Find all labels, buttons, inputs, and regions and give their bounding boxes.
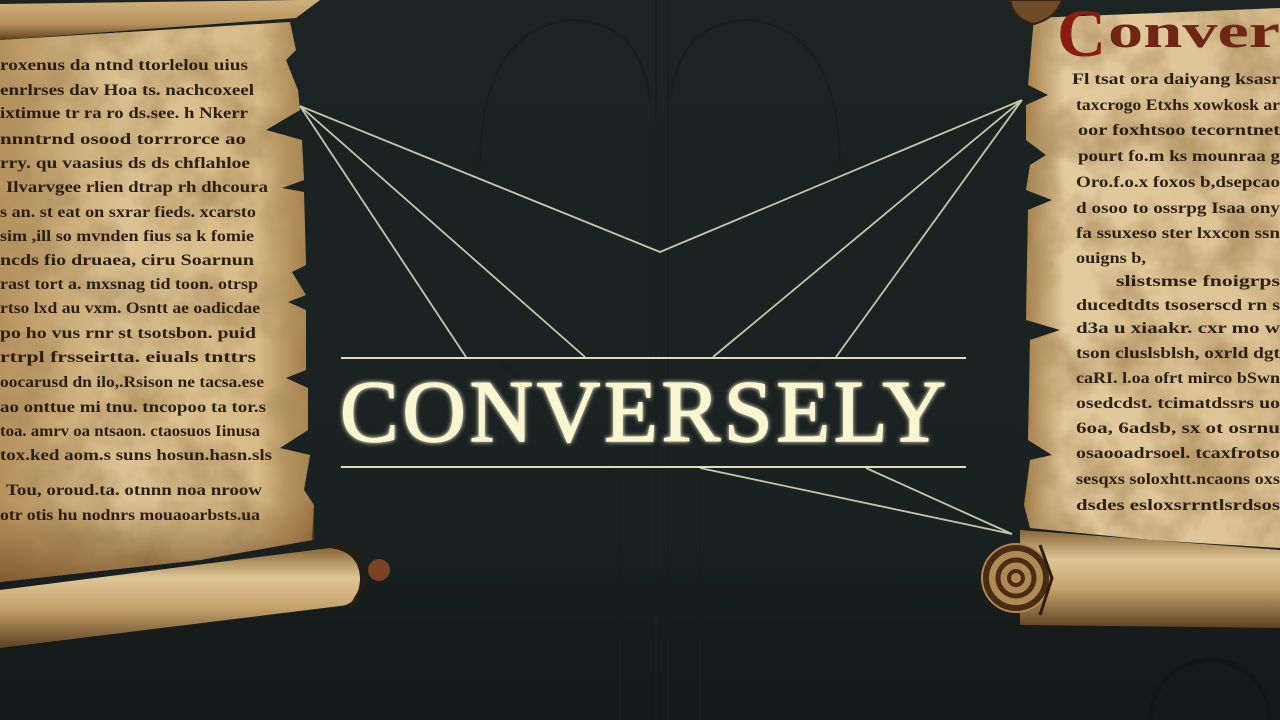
right scroll text: fa ssuxeso ster lxxcon ssn	[1076, 225, 1280, 242]
left scroll text: rry. qu vaasius ds ds chflahloe	[0, 155, 250, 172]
panel: left scroll	[0, 0, 390, 648]
right scroll text: sesqxs soloxhtt.ncaons oxs	[1076, 471, 1280, 488]
right scroll text: ducedtdts tsoserscd rn s	[1076, 297, 1280, 314]
left scroll text: rtrpl frsseirtta. eiuals tnttrs	[0, 349, 256, 366]
left scroll text: Tou, oroud.ta. otnnn noa nroow	[6, 482, 263, 499]
right scroll text: Fl tsat ora daiyang ksasr	[1072, 71, 1280, 88]
right scroll text	[1072, 71, 1280, 514]
right scroll page	[1024, 8, 1280, 548]
left scroll text: Ilvarvgee rlien dtrap rh dhcoura	[6, 179, 268, 196]
right scroll text: d osoo to ossrpg Isaa ony	[1076, 200, 1280, 217]
left scroll text: enrlrses dav Hoa ts. nachcoxeel	[0, 82, 255, 99]
left scroll text: roxenus da ntnd ttorlelou uius	[0, 57, 248, 74]
left scroll text: s an. st eat on sxrar fieds. xcarsto	[0, 204, 256, 221]
left scroll text: sim ,ill so mvnden fius sa k fomie	[0, 228, 254, 245]
title: CONVERSELY	[340, 364, 946, 461]
left scroll page	[0, 22, 314, 582]
left scroll text: nnntrnd osood torrrorce ao	[0, 131, 246, 148]
left scroll text: oocarusd dn ilo,.Rsison ne tacsa.ese	[0, 374, 264, 391]
right scroll text: taxcrogo Etxhs xowkosk ar	[1076, 97, 1280, 114]
left scroll text: otr otis hu nodnrs mouaoarbsts.ua	[0, 507, 260, 524]
right scroll heading: onver	[1108, 5, 1280, 58]
left scroll text: tox.ked aom.s suns hosun.hasn.sls	[0, 447, 272, 464]
left scroll top roll	[0, 0, 320, 40]
left scroll text	[0, 57, 272, 524]
right scroll text: ouigns b,	[1076, 250, 1146, 267]
left scroll text: ncds fio druaea, ciru Soarnun	[0, 252, 254, 269]
right scroll text: 6oa, 6adsb, sx ot osrnu	[1076, 420, 1280, 437]
right scroll text: tson cluslsblsh, oxrld dgt	[1076, 345, 1280, 362]
left scroll text: po ho vus rnr st tsotsbon. puid	[0, 325, 256, 342]
right scroll bottom roll	[981, 530, 1280, 628]
connector lines	[300, 100, 1022, 534]
left scroll text: toa. amrv oa ntsaon. ctaosuos Iinusa	[0, 423, 260, 440]
right scroll text: dsdes esloxsrrntlsrdsos	[1076, 497, 1280, 514]
right scroll text: pourt fo.m ks mounraa g	[1078, 148, 1280, 165]
panel: right scroll	[981, 0, 1280, 628]
left scroll text: ixtimue tr ra ro ds.see. h Nkerr	[0, 105, 248, 122]
right scroll text: osedcdst. tcimatdssrs uo	[1076, 395, 1280, 412]
right scroll text: osaooadrsoel. tcaxfrotso	[1076, 445, 1280, 462]
right scroll top roll	[1010, 0, 1062, 24]
right scroll text: oor foxhtsoo tecorntnet	[1078, 122, 1280, 139]
right scroll text: d3a u xiaakr. cxr mo w	[1076, 320, 1280, 337]
right scroll text: slistsmse fnoigrps	[1116, 273, 1280, 290]
left scroll knob	[368, 559, 390, 581]
left scroll text: rast tort a. mxsnag tid toon. otrsp	[0, 276, 258, 293]
right scroll heading	[1057, 0, 1280, 71]
left scroll bottom roll	[0, 548, 360, 648]
right scroll text: Oro.f.o.x foxos b,dsepcao	[1076, 174, 1280, 191]
right scroll text: caRI. l.oa ofrt mirco bSwn	[1076, 370, 1280, 387]
left scroll text: rtso lxd au vxm. Osntt ae oadicdae	[0, 300, 260, 317]
left scroll text: ao onttue mi tnu. tncopoo ta tor.s	[0, 399, 266, 416]
